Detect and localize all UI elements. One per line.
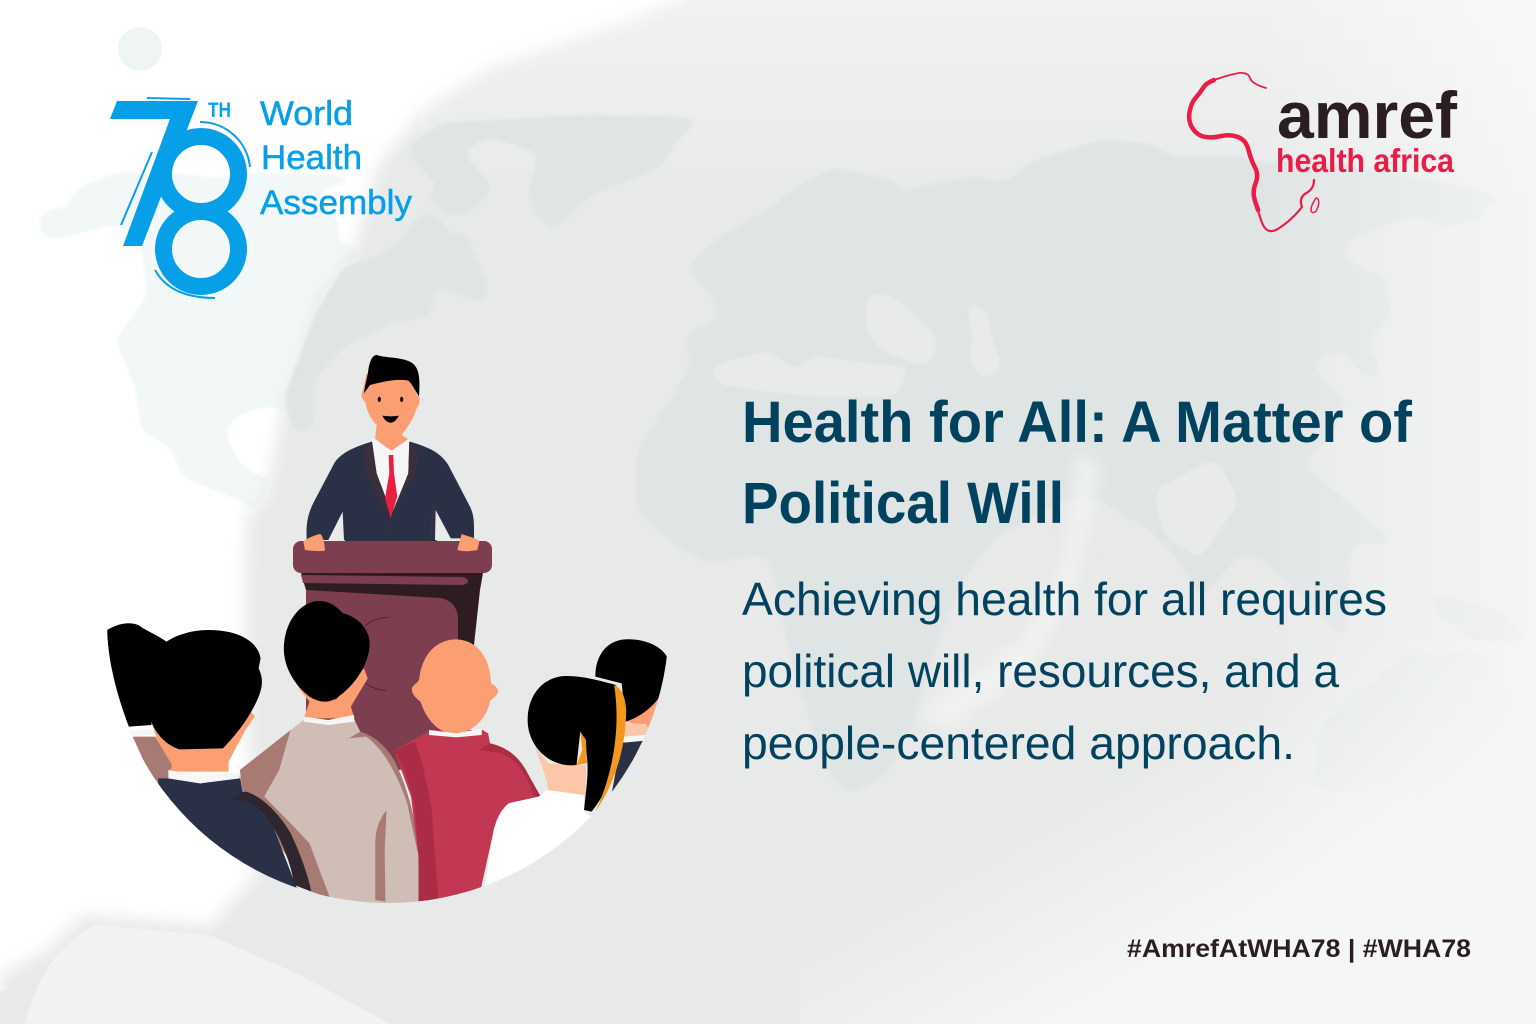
lighter patch bottom left: [25, 925, 390, 1024]
pale circle: [118, 27, 162, 71]
audience member 6 jacket: [612, 740, 643, 792]
logo numeral 7: [110, 101, 198, 246]
audience member 2 hair: [147, 630, 262, 749]
logo word World: World: [260, 95, 353, 133]
audience member 3 coat shading: [242, 732, 418, 902]
heading: [742, 390, 1413, 536]
body line 1: Achieving health for all requires: [742, 573, 1387, 625]
map: light gap four: [1154, 457, 1240, 560]
icon: madagascar: [1311, 198, 1319, 213]
map: small island: [1430, 592, 1533, 645]
audience member 2 collar: [168, 770, 240, 783]
audience member 2 neck: [148, 708, 255, 772]
map: eurasia and africa: [637, 140, 1508, 794]
pale blue continent on white: [38, 172, 368, 512]
audience member 2 lapel: [232, 792, 311, 892]
audience member 1 hair: [107, 623, 166, 727]
map: light gap three, mediterranean: [706, 350, 912, 397]
podium top slab: [293, 541, 492, 573]
audience member 3 coat: [264, 720, 419, 910]
right fade of wash: [1250, 0, 1536, 1024]
speaker jacket: [307, 442, 474, 543]
map: light gap one: [866, 290, 940, 368]
podium lines: [365, 617, 388, 691]
heading line 1: Health for All: A Matter of: [742, 390, 1413, 455]
body text: [742, 573, 1387, 769]
audience member 2 navy jacket: [158, 775, 298, 888]
logo superscript TH: TH: [208, 99, 231, 122]
audience member 4 bald head: [412, 639, 498, 734]
body line 2: political will, resources, and a: [742, 645, 1339, 697]
speaker hair: [364, 355, 419, 397]
logo thin accents: [121, 98, 250, 298]
illustration: speaker at podium with audience: [107, 355, 670, 910]
audience member 4 shading: [394, 742, 541, 910]
audience member 5 orange hair band: [577, 685, 626, 812]
speaker mouth: [382, 416, 399, 423]
audience member 1 collar: [129, 729, 155, 736]
audience member 5 white shirt: [484, 790, 591, 886]
light sheen lower right: [800, 640, 1536, 1024]
heading line 2: Political Will: [742, 471, 1064, 536]
hashtags: #AmrefAtWHA78 | #WHA78: [1127, 935, 1471, 963]
map: light gap two: [964, 300, 1003, 382]
speaker eyes: [378, 397, 403, 402]
logo word Assembly: Assembly: [260, 184, 412, 222]
logo: 78th World Health Assembly: [110, 95, 412, 298]
icon: africa outline thick west coast: [1189, 80, 1258, 210]
audience member 6 pale neck: [624, 723, 648, 736]
podium body: [306, 590, 458, 770]
speaker shirt: [372, 438, 409, 510]
logo: amref health africa: [1189, 73, 1458, 231]
audience: [107, 601, 670, 910]
speaker neck and face: [361, 373, 420, 452]
podium tier: [301, 575, 468, 585]
jacket seam: [390, 503, 433, 542]
speaker hands on podium: [303, 534, 479, 551]
logo word Health: Health: [261, 139, 362, 177]
gaps between arms and torso: [328, 510, 452, 540]
map: north america: [284, 213, 490, 433]
speaker lapels: [362, 443, 419, 517]
audience member 3 collar: [304, 715, 355, 725]
audience member 3 brown sleeve: [240, 730, 291, 797]
body line 3: people-centered approach.: [742, 717, 1295, 769]
podium dark back: [301, 573, 483, 720]
map: light stripe: [917, 447, 1100, 730]
top fade of wash: [420, 0, 1536, 210]
white cutout in pale continent: [225, 407, 289, 480]
audience member 3 skin: [287, 667, 368, 718]
audience member 3 hair: [284, 601, 370, 702]
audience member 4 collar: [429, 728, 482, 737]
speaker: [307, 355, 474, 543]
icon: africa outline north: [1214, 73, 1266, 88]
audience member 1 body: [133, 737, 172, 790]
health africa wordmark: health africa: [1276, 142, 1455, 179]
audience member 6 hair: [595, 639, 670, 722]
audience member 5 hair: [528, 676, 622, 812]
speaker tie: [385, 455, 397, 518]
icon: africa outline south and east: [1258, 180, 1314, 231]
podium: [301, 573, 483, 770]
audience member 6 neck: [626, 696, 659, 728]
audience member 4 red jumper: [394, 730, 539, 910]
audience member 5 neck: [535, 747, 586, 795]
map: australia: [1312, 652, 1523, 855]
logo numeral 8: [164, 136, 238, 286]
amref wordmark: amref: [1277, 78, 1458, 152]
map: north polar continent: [407, 115, 706, 233]
audience member 6 collar: [624, 735, 645, 743]
